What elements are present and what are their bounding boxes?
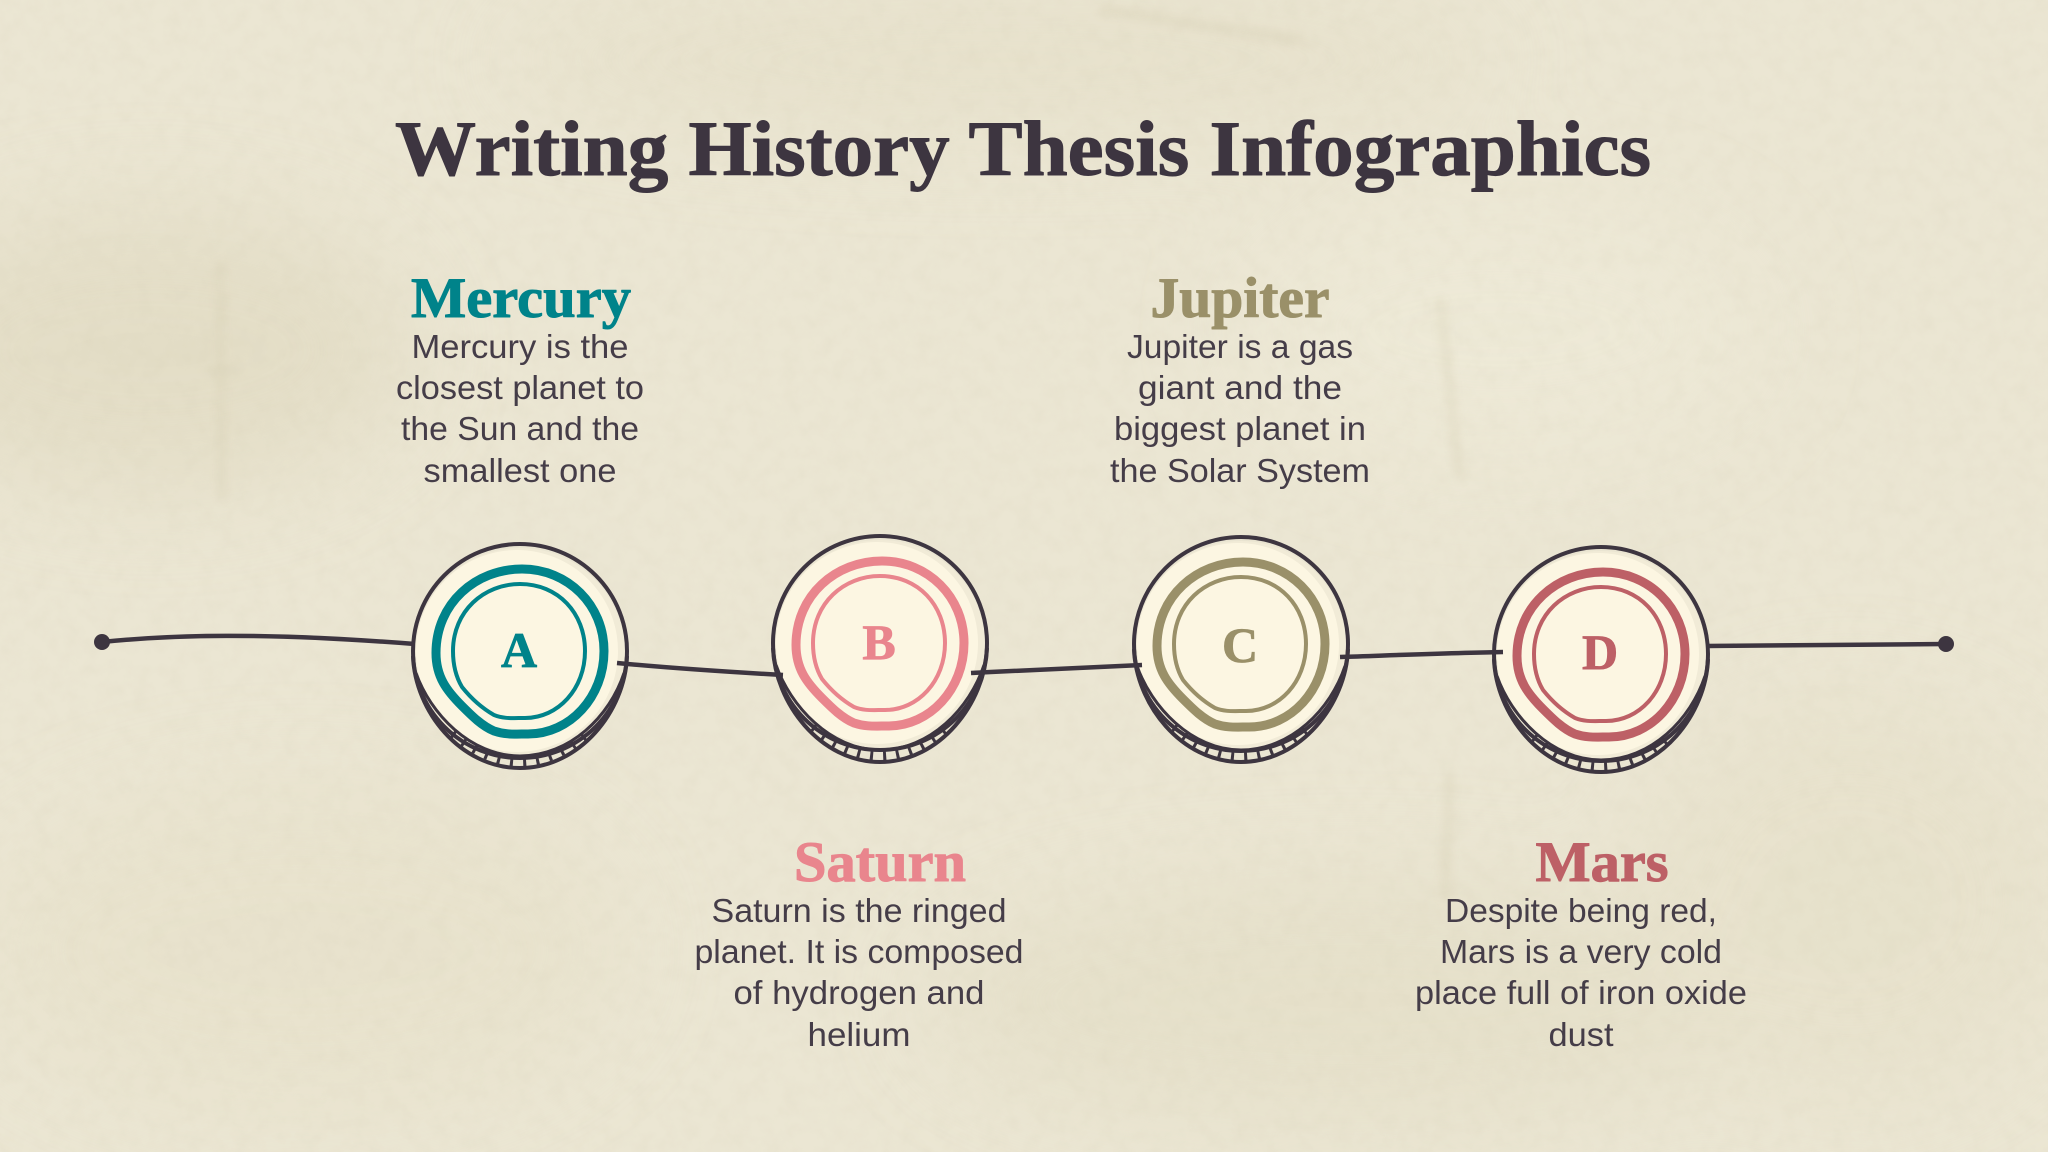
letter B: B (862, 614, 896, 670)
Saturn description: helium (808, 1016, 910, 1053)
text block: Mercury (396, 267, 644, 489)
letter A: A (501, 622, 537, 678)
Mercury description: smallest one (424, 452, 616, 489)
text block: Saturn (694, 831, 1024, 1053)
Mars description: Mars is a very cold (1440, 933, 1722, 970)
text block: Mars (1415, 831, 1747, 1053)
Saturn description: Saturn is the ringed (712, 892, 1006, 929)
Saturn description: planet. It is composed (694, 933, 1024, 970)
marker A: Mercury coin (413, 544, 627, 768)
Jupiter description: giant and the (1138, 369, 1342, 406)
Mars description: dust (1548, 1016, 1614, 1053)
Mars description: Despite being red, (1445, 892, 1717, 929)
Mercury description (396, 328, 644, 489)
marker D: Mars coin (1494, 547, 1708, 772)
Mercury description: the Sun and the (401, 410, 639, 447)
Saturn description: of hydrogen and (734, 974, 984, 1011)
title: Writing History Thesis Infographics (395, 105, 1651, 192)
Mars description: place full of iron oxide (1415, 974, 1747, 1011)
text block: Jupiter: Jupiter (1150, 267, 1330, 330)
Mercury description: closest planet to (396, 369, 644, 406)
Jupiter description: the Solar System (1110, 452, 1370, 489)
letter C: C (1222, 617, 1258, 673)
timeline line (94, 634, 1954, 675)
Jupiter description: Jupiter is a gas (1127, 328, 1353, 365)
Mars description (1415, 892, 1747, 1053)
text block: Mars: Mars (1536, 831, 1668, 894)
marker C: Jupiter coin (1134, 537, 1348, 762)
text block: Saturn: Saturn (794, 831, 966, 894)
Jupiter description (1110, 328, 1370, 489)
text block: Jupiter (1110, 267, 1370, 489)
marker B: Saturn coin (773, 536, 987, 762)
Jupiter description: biggest planet in (1114, 410, 1366, 447)
Mercury description: Mercury is the (412, 328, 628, 365)
text block: Mercury: Mercury (411, 267, 631, 330)
Saturn description (694, 892, 1024, 1053)
letter D: D (1582, 624, 1618, 680)
